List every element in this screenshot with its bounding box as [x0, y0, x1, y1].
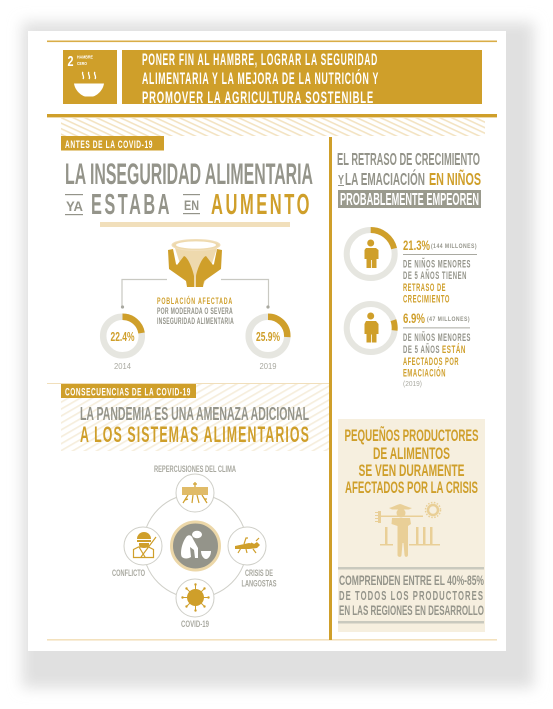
caption: poblacion afectada: INSEGURIDAD ALIMENTARIA: [157, 316, 234, 326]
stat: wasting: (47 MILLONES): [427, 316, 470, 323]
chart: stunting donut: [347, 230, 395, 278]
stat: stunting: 21.3%: [403, 238, 430, 253]
caption: poblacion afectada: POR MODERADA O SEVERA: [157, 306, 233, 317]
title banner: PROMOVER LA AGRICULTURA SOSTENIBLE: [142, 89, 374, 107]
stat: wasting: [403, 311, 471, 388]
heading: la inseguridad alimentaria: YA: [66, 198, 83, 214]
chart: donut 2019: [249, 305, 287, 371]
chart: donut 2019: 25.9%: [256, 329, 280, 344]
caption: poblacion afectada: POBLACIÓN AFECTADA: [157, 295, 233, 307]
hatched band: [61, 118, 485, 136]
heading: la inseguridad alimentaria: EN: [184, 197, 199, 213]
label: locust crisis: LANGOSTAS: [242, 578, 276, 588]
chart: wasting donut: [340, 297, 401, 359]
icon: SDG 2 zero hunger: CERO: [77, 61, 87, 66]
icon: conflict soldier: [124, 527, 162, 565]
stat: stunting: RETRASO DE: [403, 282, 446, 294]
section label: consecuencias: [61, 384, 196, 398]
icon: SDG 2 zero hunger: HAMBRE: [77, 54, 93, 60]
heading: small producers: [344, 425, 478, 497]
section label: consecuencias: CONSECUENCIAS DE LA COVID-19: [65, 386, 191, 398]
stat: stunting: CRECIMIENTO: [403, 294, 450, 306]
heading: retraso de crecimiento: LA EMACIACIÓN: [345, 168, 425, 189]
section label: antes de la covid-19: [61, 136, 164, 151]
label: covid-19: COVID-19: [181, 619, 209, 629]
diagram: food system threats: [112, 464, 276, 629]
heading: retraso de crecimiento: Y: [338, 172, 344, 187]
icon: locust: [228, 527, 266, 565]
heading underline: [100, 222, 290, 227]
panel: small producers: [338, 419, 485, 632]
stat: wasting: (2019): [403, 381, 422, 388]
stat: stunting: (144 MILLONES): [431, 243, 477, 250]
text: comprenden: [339, 572, 484, 618]
heading: retraso de crecimiento: [337, 149, 481, 209]
chart: donut 2014: 2014: [114, 362, 132, 371]
arrow: to 2019: [221, 280, 268, 306]
section label: antes de la covid-19: ANTES DE LA COVID-19: [65, 139, 153, 151]
stat: stunting: DE NIÑOS MENORES: [403, 258, 471, 270]
chart: donut 2014: [103, 305, 142, 371]
hatched band: consequences: [61, 384, 329, 451]
stat: stunting: [403, 238, 477, 306]
stat: wasting: DE 5 AÑOS: [403, 343, 440, 356]
heading: la inseguridad alimentaria: AUMENTO: [211, 189, 312, 221]
heading: la inseguridad alimentaria: [65, 158, 313, 221]
heading: la pandemia: LA PANDEMIA ES UNA AMENAZA ADICIONAL: [80, 404, 309, 424]
title banner: [122, 50, 482, 107]
column divider: [329, 137, 332, 640]
stat: stunting: DE 5 AÑOS TIENEN: [403, 269, 467, 282]
icon: SDG 2 zero hunger: 2: [68, 53, 74, 70]
icon: SDG 2 zero hunger: [63, 50, 117, 104]
stat: wasting: DE NIÑOS MENORES: [403, 331, 471, 344]
heading: small producers: SE VEN DURAMENTE: [358, 462, 464, 480]
stat: wasting: AFECTADOS POR: [403, 356, 459, 368]
heading: la pandemia: A LOS SISTEMAS ALIMENTARIOS: [80, 422, 310, 447]
heading: la pandemia: [80, 404, 310, 447]
stat: wasting: ESTÁN: [442, 343, 466, 356]
chart: donut 2014: 22.4%: [110, 329, 135, 344]
label: climate: REPERCUSIONES DEL CLIMA: [154, 464, 236, 474]
infographic page: [28, 31, 506, 651]
label: conflict: CONFLICTO: [112, 568, 145, 578]
caption: poblacion afectada: [157, 295, 234, 326]
icon: climate: [176, 474, 214, 512]
icon: central person with bowl: [172, 522, 220, 570]
icon: hands holding bowl: [168, 240, 222, 287]
heading: small producers: DE ALIMENTOS: [373, 445, 450, 463]
label: locust crisis: [242, 568, 276, 588]
chart: donut 2019: 2019: [260, 362, 277, 371]
heading: la inseguridad alimentaria: ESTABA: [91, 189, 172, 221]
stat: wasting: EMACIACIÓN: [403, 366, 446, 380]
arrow: to 2014: [122, 280, 167, 306]
icon: virus: [176, 579, 214, 617]
label: locust crisis: CRISIS DE: [245, 568, 273, 578]
heading: retraso de crecimiento: EN NIÑOS: [429, 168, 481, 189]
heading: la inseguridad alimentaria: LA INSEGURIDAD ALIMENTARIA: [65, 158, 313, 191]
icon: farmer and crops: [375, 502, 440, 557]
stat: wasting: 6.9%: [403, 311, 425, 326]
